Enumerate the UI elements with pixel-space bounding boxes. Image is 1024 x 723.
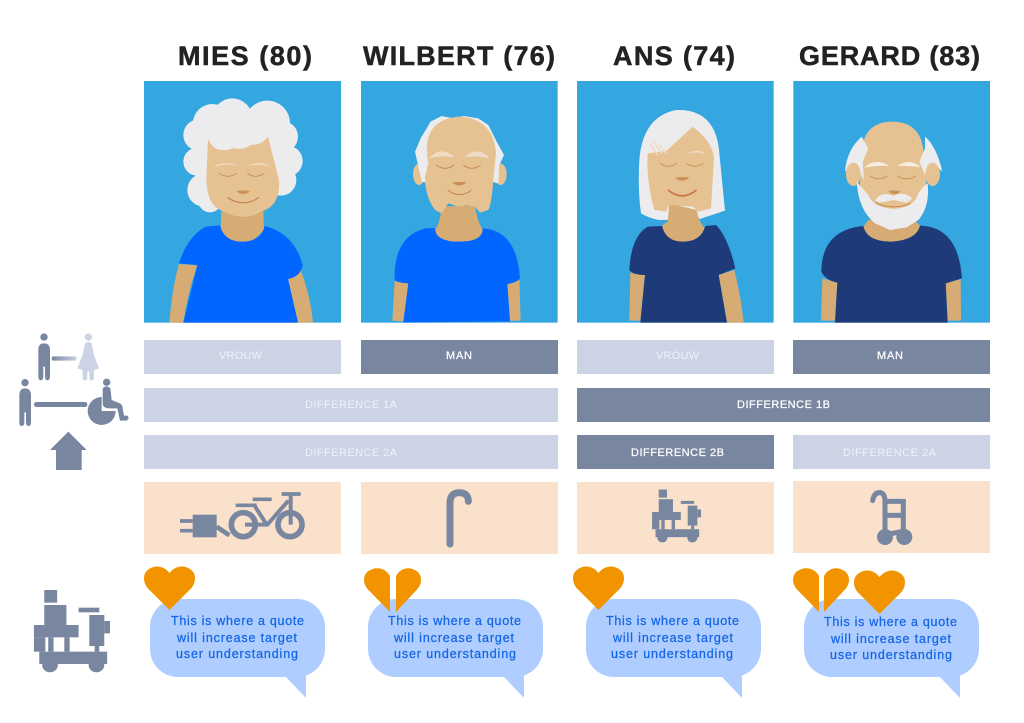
bar: Wilbert gender: MAN — [446, 350, 472, 362]
portrait: Wilbert — [361, 81, 558, 323]
bar: Gerard gender — [793, 340, 990, 374]
bar: Mies gender — [144, 340, 341, 374]
speech bubble: Ans: This is where a quote — [606, 614, 739, 628]
speech bubble: Mies: will increase target — [176, 631, 298, 645]
icon: house — [50, 432, 87, 470]
icon: rollator — [873, 493, 912, 545]
heading: Wilbert: WILBERT (76) — [363, 41, 555, 71]
heading: Mies: MIES (80) — [178, 41, 312, 71]
icon: full heart Mies — [144, 567, 195, 610]
speech bubble: Gerard — [804, 599, 979, 698]
bar: difference 2A left — [144, 435, 558, 469]
icons: gender, mobility and housing row markers — [19, 333, 129, 470]
portrait: Ans — [577, 81, 774, 323]
bar: difference 2B: DIFFERENCE 2B — [631, 447, 724, 459]
portrait: Mies — [144, 81, 341, 323]
arrow: gender difference — [52, 356, 77, 361]
panel: rollator — [793, 481, 990, 553]
row: gender — [144, 340, 990, 374]
bar: difference 1A: DIFFERENCE 1A — [305, 399, 398, 411]
bar: Ans gender — [577, 340, 774, 374]
icon: woman — [77, 333, 99, 380]
bar: difference 2B — [577, 435, 774, 469]
icon: standing person — [19, 379, 31, 426]
bar: difference 2A left: DIFFERENCE 2A — [305, 447, 398, 459]
icon: walking cane — [450, 493, 468, 544]
portrait: Gerard — [793, 81, 990, 323]
speech bubble: Wilbert: user understanding — [394, 647, 516, 661]
heading: Gerard: GERARD (83) — [799, 41, 980, 71]
icon: man — [38, 333, 50, 380]
speech bubble: Wilbert: will increase target — [393, 631, 515, 645]
panel: e-bike — [144, 482, 341, 554]
speech bubble: Mies: user understanding — [176, 647, 298, 661]
row: difference 2 — [144, 435, 990, 469]
speech bubble: Ans: will increase target — [612, 631, 734, 645]
speech bubble: Gerard: user understanding — [830, 648, 952, 662]
bar: difference 1B: DIFFERENCE 1B — [737, 399, 830, 411]
speech bubble: Wilbert: This is where a quote — [388, 614, 521, 628]
icon: electric bike — [180, 494, 302, 537]
speech bubble: Mies: This is where a quote — [171, 614, 304, 628]
icon: broken heart Gerard — [793, 568, 849, 612]
heading: Ans: ANS (74) — [613, 41, 735, 71]
speech bubble: Ans: user understanding — [611, 647, 733, 661]
icon: broken heart Wilbert — [364, 568, 421, 612]
panel: mobility scooter — [577, 482, 774, 554]
bar: Mies gender: VROUW — [219, 350, 263, 362]
arrow: mobility difference — [34, 402, 87, 407]
bar: difference 1A — [144, 388, 558, 422]
bar: Ans gender: VROUW — [656, 350, 700, 362]
speech bubble: Gerard: will increase target — [830, 632, 952, 646]
bar: difference 2A right — [793, 435, 990, 469]
speech bubble: Mies — [150, 599, 325, 698]
icon: mobility scooter row marker — [34, 590, 110, 672]
icon: small mobility scooter — [652, 490, 701, 543]
bar: Wilbert gender — [361, 340, 558, 374]
row: difference 1 — [144, 388, 990, 422]
speech bubble: Gerard: This is where a quote — [824, 615, 957, 629]
bar: difference 1B — [577, 388, 990, 422]
speech bubble: Ans — [586, 599, 761, 698]
icon: full heart Ans — [573, 567, 624, 610]
speech bubble: Wilbert — [368, 599, 543, 698]
panel: cane — [361, 482, 558, 554]
bar: difference 2A right: DIFFERENCE 2A — [843, 447, 937, 459]
icon: wheelchair user — [88, 379, 129, 425]
icon: full heart Gerard — [854, 571, 905, 614]
bar: Gerard gender: MAN — [877, 350, 903, 362]
